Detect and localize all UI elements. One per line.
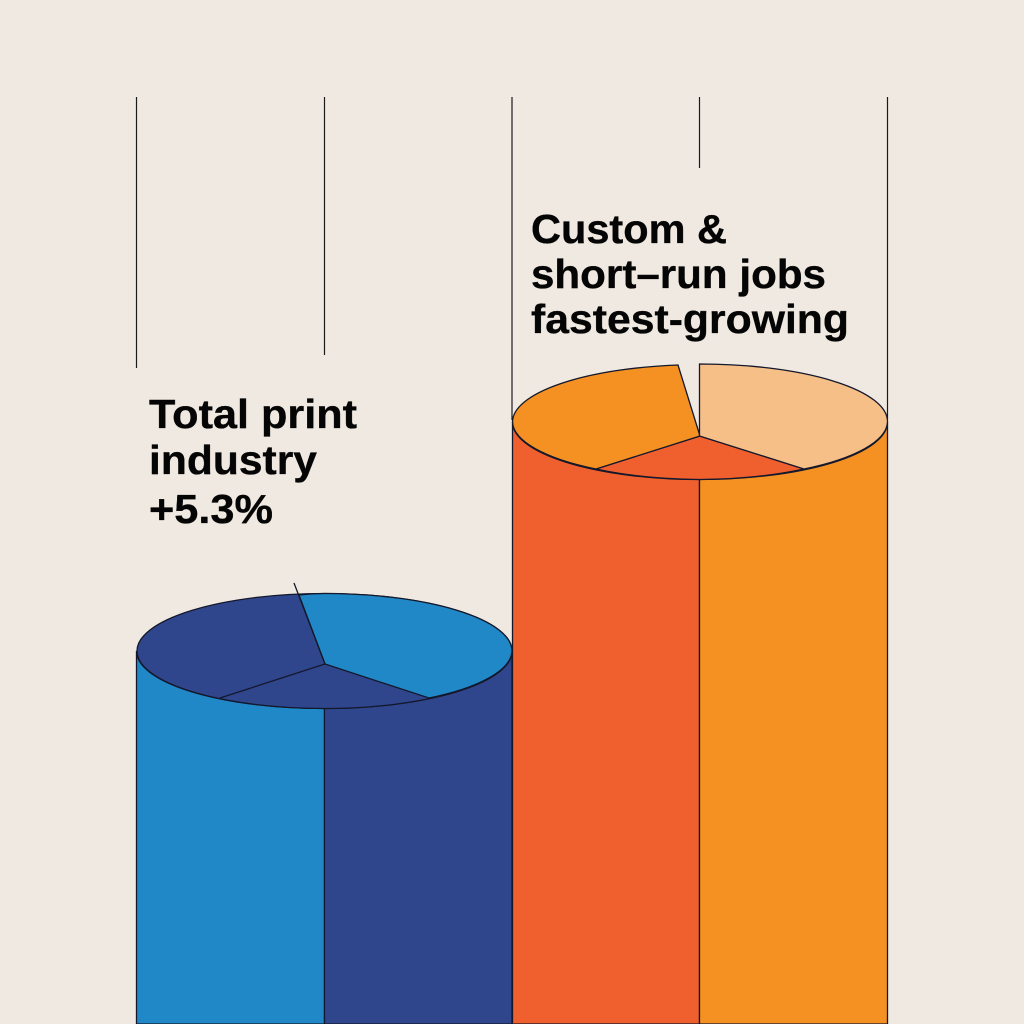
label: total print industry: +5.3% (149, 486, 273, 532)
top slice: light blue (299, 594, 512, 698)
cylinder top: navy base ellipse (137, 594, 512, 708)
label: custom and short-run jobs: fastest-growing (531, 296, 849, 342)
cylinder body right: navy (324, 651, 512, 1024)
top slice: pale peach (700, 364, 888, 469)
vertical guide lines (136, 97, 888, 420)
label: total print industry: Total print (149, 391, 357, 437)
top slice: red-orange (596, 436, 804, 480)
label: custom and short-run jobs (531, 206, 849, 342)
cylinder: total print industry (136, 583, 512, 1024)
cylinder body right: orange (700, 422, 888, 1024)
cylinder body left: light blue (136, 651, 324, 1024)
top slice lines (220, 583, 325, 698)
label: total print industry (149, 391, 357, 532)
cylinder: custom and short-run jobs (512, 364, 888, 1024)
top slice: orange (512, 365, 700, 469)
label: custom and short-run jobs: Custom & (531, 206, 727, 252)
label: total print industry: industry (149, 437, 317, 483)
cylinder body left: red-orange (512, 422, 700, 1024)
label: custom and short-run jobs: short–run jobs (531, 251, 826, 297)
